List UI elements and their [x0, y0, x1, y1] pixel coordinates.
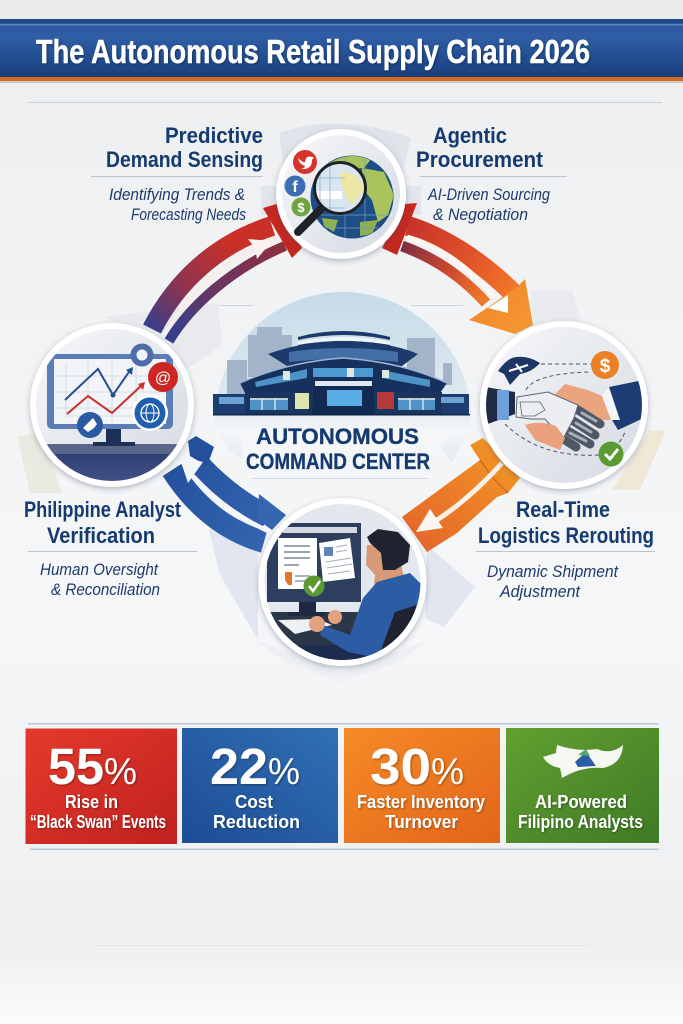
icon: social twitter	[293, 150, 317, 174]
stat card: 55%: %	[104, 751, 137, 792]
stat card: 55%	[26, 728, 177, 844]
step label: agentic procurement: Procurement	[416, 147, 544, 172]
icon: magnifying glass	[298, 162, 366, 232]
robot arm cuff	[485, 387, 515, 425]
node: analyst at workstation	[255, 498, 430, 672]
stat card: 22%	[182, 728, 338, 843]
stat card: 30%: Faster Inventory	[357, 792, 485, 812]
roof rings	[298, 331, 390, 340]
icon: at sign: @	[155, 370, 171, 387]
step label: philippine analyst verification: Philippine Analyst	[24, 497, 182, 522]
icon: social dollar: $	[297, 200, 305, 215]
step label: agentic procurement: Agentic	[433, 123, 507, 148]
step label: philippine analyst verification	[24, 497, 197, 599]
step label: real-time logistics rerouting: Dynamic Shipment	[487, 563, 619, 581]
dome backdrop	[215, 292, 471, 470]
step label: philippine analyst verification: Verification	[47, 523, 155, 548]
dashed orbit	[505, 364, 625, 455]
lower floor	[245, 392, 442, 415]
human hand lower	[525, 423, 565, 450]
skyline	[227, 327, 452, 394]
icon: dollar badge: $	[600, 356, 611, 377]
stat card: 55%: Rise in	[65, 792, 118, 812]
icon: flag	[543, 745, 623, 778]
node: handshake	[480, 321, 650, 489]
icon: airplane	[498, 357, 540, 385]
step label: philippine analyst verification: & Reconciliation	[51, 581, 160, 599]
step label: agentic procurement: & Negotiation	[433, 206, 528, 224]
wings	[213, 394, 245, 415]
icon: check badge	[598, 442, 624, 466]
step label: agentic procurement: AI-Driven Sourcing	[427, 186, 551, 204]
stat card: 22%: Reduction	[213, 812, 300, 832]
stat card: AI-powered Filipino analysts	[506, 728, 659, 843]
pale backing shapes behind the cycle	[17, 124, 666, 682]
stat card: 30%: Turnover	[385, 812, 458, 832]
stat card: AI-powered Filipino analysts: Filipino Analysts	[518, 812, 643, 832]
step label: philippine analyst verification: Human Oversight	[40, 561, 159, 579]
arrow: demand sensing to analyst (red-blue arc)	[152, 203, 302, 341]
stat card: 30%: %	[431, 751, 464, 792]
icon: web globe	[132, 395, 168, 431]
monitor	[47, 354, 173, 446]
step label: predictive demand sensing: Demand Sensing	[106, 147, 263, 172]
node: analytics monitor	[30, 323, 200, 495]
icon: gray node	[130, 344, 154, 366]
stat card: 22%: %	[268, 751, 300, 792]
arrow: procurement to logistics (red-orange arc)	[382, 203, 533, 334]
desk surface	[270, 612, 414, 660]
stat card: 22%: 22	[210, 738, 268, 795]
keyboard	[278, 619, 332, 634]
desk	[48, 445, 176, 481]
stat card: 55%: “Black Swan” Events	[30, 812, 166, 832]
step label: predictive demand sensing: Identifying Trends &	[109, 186, 245, 204]
step label: predictive demand sensing	[91, 123, 263, 224]
stat card: AI-powered Filipino analysts: AI-Powered	[535, 792, 627, 812]
white cuff	[600, 387, 620, 420]
analyst figure	[309, 529, 422, 658]
line chart blue	[65, 369, 131, 400]
stat card: 22%: Cost	[235, 792, 273, 812]
center: autonomous command center	[213, 292, 471, 479]
monitor and documents	[267, 523, 361, 616]
second tier roof	[240, 358, 447, 393]
rotunda	[268, 341, 418, 366]
robot hand	[516, 392, 578, 439]
icon: globe	[310, 155, 394, 240]
node: predictive demand sensing globe	[276, 129, 406, 259]
center: autonomous command center: COMMAND CENTER	[246, 449, 430, 474]
stat card: 55%: 55	[48, 738, 104, 795]
building	[213, 331, 470, 416]
line chart red	[67, 384, 143, 414]
chair	[378, 602, 418, 652]
icon: at sign	[148, 362, 178, 392]
step label: agentic procurement	[416, 123, 567, 224]
step label: predictive demand sensing: Forecasting Needs	[131, 206, 246, 224]
center label: AUTONOMOUS	[256, 424, 419, 449]
step label: real-time logistics rerouting: Real-Time	[516, 497, 610, 522]
step label: real-time logistics rerouting	[476, 497, 655, 601]
title banner	[0, 19, 683, 83]
arrow: logistics to analyst (orange arc)	[402, 438, 520, 552]
robot fingers	[565, 410, 600, 447]
icon: check badge	[304, 576, 324, 596]
icon: social facebook: f	[292, 179, 298, 196]
upper windows	[255, 369, 307, 387]
icon: share badge	[77, 412, 103, 438]
arrow: analyst to verification (blue arc)	[172, 436, 286, 542]
step label: real-time logistics rerouting: Adjustment	[499, 583, 581, 601]
stat card: 30%: 30	[370, 738, 431, 795]
icon: dollar badge	[591, 351, 619, 379]
step label: real-time logistics rerouting: Logistics Rerouting	[478, 523, 654, 548]
human hand upper	[550, 384, 611, 420]
suit sleeve	[609, 381, 642, 430]
stat card: 30%	[344, 728, 500, 843]
step label: predictive demand sensing: Predictive	[165, 123, 263, 148]
